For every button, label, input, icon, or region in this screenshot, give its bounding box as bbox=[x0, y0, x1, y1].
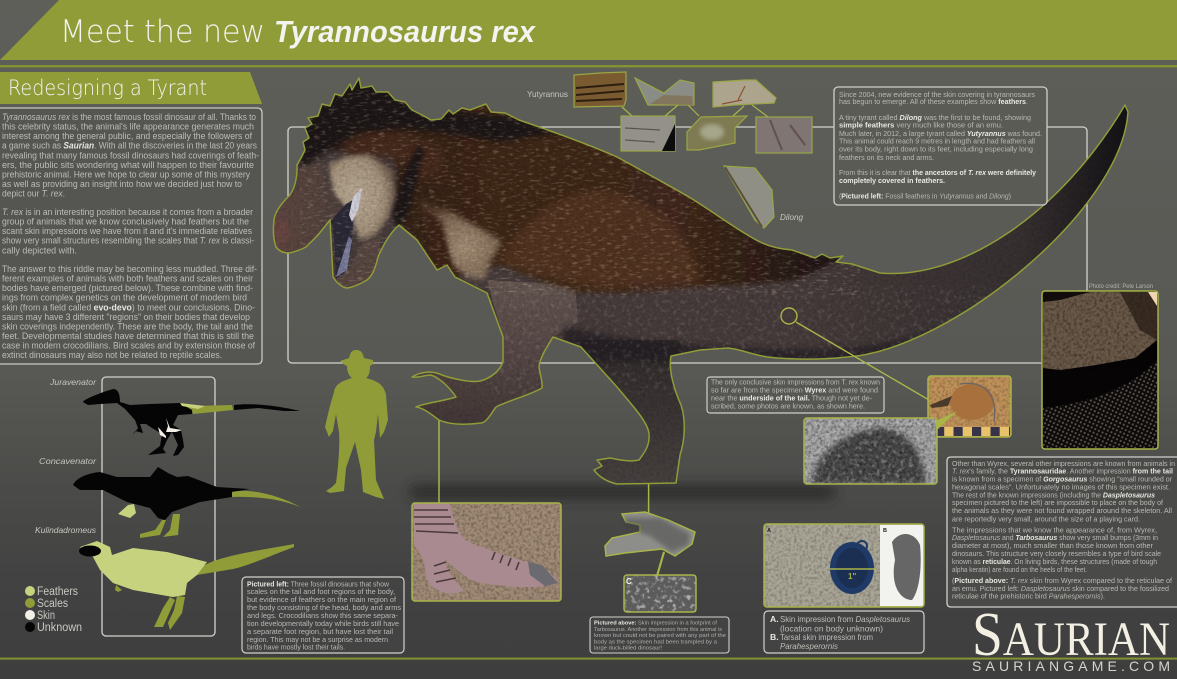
panel: feather evidence text bbox=[834, 87, 1047, 205]
panel: pictured above text: Pictured above: Skin impression in a footprint of bbox=[594, 620, 717, 626]
panel: A B captions: Skin impression from Daspletosaurus bbox=[780, 614, 911, 624]
rex forward leg bbox=[416, 280, 578, 378]
panel: feather evidence text: Since 2004, new evidence of the skin covering in tyrannosaurs bbox=[839, 90, 1035, 99]
panel: A B captions: (location on body unknown) bbox=[780, 623, 883, 633]
photo: Daspletosaurus skin and Parahesperornis tarsal: A bbox=[767, 528, 771, 534]
panel: other impressions text: known as reticulae. On living birds, these structures (made of tough bbox=[952, 557, 1157, 566]
rex back leg bbox=[594, 340, 684, 434]
rex chest cream fur bbox=[420, 200, 502, 280]
legend: Feathers bbox=[37, 586, 78, 598]
panel: other impressions text: Daspletosaurus and Tarbosaurus show very small bumps (3mm in bbox=[952, 533, 1158, 542]
rex snout tint bbox=[274, 222, 288, 242]
panel: intro text: a game such as Saurian. With all the discoveries in the last 20 years bbox=[2, 141, 258, 151]
panel: feather evidence text: A tiny tyrant called Dilong was the first to be found, showing bbox=[839, 113, 1031, 122]
callout line: left foot to photo bbox=[438, 420, 440, 504]
fossil photo 1 bbox=[574, 72, 626, 107]
panel: pictured above text: Tarbosaurus. Another impression from this animal is bbox=[594, 627, 722, 633]
panel: intro text: group of animals that we know conclusively had feathers but the bbox=[2, 217, 249, 227]
panel: intro text: ers, the public sits wondering what will happen to their favourite bbox=[2, 160, 254, 170]
panel: other impressions text: is known from a specimen of Gorgosaurus showing "small rounded or bbox=[952, 475, 1173, 484]
photo: Daspletosaurus skin and Parahesperornis tarsal: 1" bbox=[848, 572, 856, 581]
rex hanging arm fur bbox=[424, 208, 456, 271]
panel: pictured left text: scales on the tail and foot regions of the body, bbox=[247, 587, 395, 596]
rex scale mottling bbox=[487, 285, 1047, 395]
label: Dilong: Dilong bbox=[780, 212, 803, 222]
panel: intro text: case in modern crocodilians. Bird scales and by extension those of bbox=[2, 341, 256, 351]
panel: Wyrex text: The only conclusive skin impressions from T. rex known bbox=[711, 378, 880, 386]
panel: intro text: scant skin impressions we have from it and it's immediate relatives bbox=[2, 226, 253, 236]
panel: pictured left text: and legs. Crocodilians show this same separa- bbox=[247, 611, 399, 620]
panel: other impressions text: The impressions that we know the appearance of, from Wyrex, bbox=[952, 526, 1157, 534]
panel: three dinosaurs skin comparison frame bbox=[102, 377, 215, 636]
fossil photo 4 bbox=[621, 116, 675, 151]
panel: other impressions text bbox=[947, 457, 1177, 607]
silhouette: Juravenator bbox=[83, 389, 300, 456]
rex lower jaw bbox=[333, 238, 380, 290]
panel: pictured left text: region. This may not be a surprise as modern bbox=[247, 635, 388, 644]
silhouette: Concavenator bbox=[73, 467, 302, 538]
panel: other impressions text: reticulae of the prehistoric bird Parahesperornis). bbox=[952, 592, 1105, 600]
panel: intro text: as well as providing an insight into how we decided just how to bbox=[2, 179, 242, 189]
panel: intro text: ings from complex genetics on the development of modern bird bbox=[2, 293, 247, 303]
panel: pictured above text: large duck-billed dinosaur! bbox=[594, 646, 662, 652]
panel: intro text: skin coverings independently. These are the body, the tail and the bbox=[2, 322, 253, 332]
section heading: Redesigning a Tyrant: Redesigning a Tyrant bbox=[8, 76, 207, 100]
photo C: Tarbosaurus skin detail bbox=[624, 575, 696, 612]
rex shoulder fur highlight bbox=[500, 190, 700, 288]
rex skin texture bbox=[274, 98, 1033, 482]
panel: feather evidence text: completely covered in feathers. bbox=[839, 176, 945, 185]
panel: intro text: The answer to this riddle may be becoming less muddled. Three dif- bbox=[2, 264, 257, 274]
panel: pictured above text: body as the specimen had been trampled by a bbox=[594, 640, 718, 646]
rex skin base bbox=[287, 107, 1128, 430]
panel: intro text: prehistoric animal. Here we hope to clear up some of this mystery bbox=[2, 169, 251, 179]
panel: other impressions text: hexagonal scales". Unfortunately no images of this specimen exist. bbox=[952, 482, 1170, 491]
photo: Wyrex skin greyscale bbox=[804, 411, 957, 484]
panel: A B captions: Tarsal skin impression from bbox=[780, 632, 873, 642]
label: Juravenator: Juravenator bbox=[49, 377, 97, 387]
fossil feather connectors bbox=[622, 105, 768, 117]
photo: Daspletosaurus skin and Parahesperornis tarsal: B bbox=[883, 528, 887, 534]
panel: intro text bbox=[0, 108, 262, 364]
panel: intro text: Tyrannosaurus rex is the most famous fossil dinosaur of all. Thanks to bbox=[2, 112, 256, 122]
panel: intro text: revealing that many famous fossil dinosaurs had coverings of feath- bbox=[2, 150, 259, 160]
panel: pictured left text: tion developmentally today while birds still have bbox=[247, 619, 399, 628]
panel: A B captions: A. bbox=[770, 614, 779, 624]
panel: pictured left text: the body consisting of the head, body and arms bbox=[247, 603, 401, 612]
fossil photo 5 bbox=[687, 116, 747, 150]
panel: other impressions text: specimen pictured to the left) are impossible to place on the body of bbox=[952, 498, 1163, 507]
title: Meet the new bbox=[60, 14, 265, 50]
panel: other impressions text: are reportedly very small, around the size of a playing card. bbox=[952, 514, 1140, 524]
panel: other impressions text: the animals as they were not found wrapped around the skeleton. All bbox=[952, 506, 1172, 515]
human scale silhouette bbox=[325, 350, 388, 499]
ground shadow bbox=[410, 485, 835, 499]
panel: other impressions text: an emu. Pictured left: Daspletosaurus skin compared to the fossilized bbox=[952, 584, 1169, 593]
label: Concavenator: Concavenator bbox=[39, 456, 97, 466]
panel: pictured left text: but evidence of feathers on the main region of bbox=[247, 595, 396, 604]
rex reddish upper neck bbox=[342, 132, 442, 178]
panel: Wyrex text bbox=[707, 377, 884, 413]
fossil photo: Dilong bbox=[724, 166, 774, 228]
title bbox=[60, 14, 537, 50]
panel: intro text: T. rex is in an interesting position because it comes from a broader bbox=[2, 207, 253, 217]
panel: feather evidence text: This animal could reach 9 metres in length and had feathers all bbox=[839, 136, 1035, 146]
panel: feather evidence text: (Pictured left: Fossil feathers in Yutyrannus and Dilong) bbox=[839, 192, 1011, 200]
photo: Daspletosaurus skin and Parahesperornis tarsal bbox=[764, 524, 924, 607]
rex fur coat bbox=[330, 105, 840, 295]
panel: A B captions: Parahesperornis bbox=[780, 641, 839, 651]
panel: intro text: skin (from a field called evo-devo) to meet our conclusions. Dino- bbox=[2, 302, 255, 312]
bottom rule bbox=[0, 658, 1177, 660]
panel: intro text: show very small structures resembling the scales that T. rex is classi- bbox=[2, 236, 254, 246]
panel: rex backing frame bbox=[288, 127, 1087, 363]
rex lower body shading bbox=[560, 326, 950, 362]
rex cheek cream fur bbox=[328, 154, 396, 240]
panel: intro text: saurs may have 3 different "regions" on their bodies that develop bbox=[2, 312, 250, 322]
title: Tyrannosaurus rex bbox=[274, 14, 537, 49]
panel: pictured left text bbox=[242, 577, 404, 653]
title banner bbox=[0, 0, 1177, 67]
panel: feather evidence text: simple feathers very much like those of an emu. bbox=[839, 120, 1003, 130]
rex dark mane bbox=[298, 80, 557, 168]
panel: feather evidence text: has begun to emerge. All of these examples show feathers. bbox=[839, 97, 1028, 106]
T. rex illustration bbox=[270, 70, 1140, 495]
panel: Wyrex text: so far are from the specimen Wyrex and were found bbox=[711, 386, 878, 394]
panel: intro text: feet. Developmental studies have determined that this is still the bbox=[2, 331, 254, 341]
photo C: Tarbosaurus skin detail: C bbox=[626, 577, 632, 586]
legend: Unknown bbox=[37, 622, 82, 634]
leader line fossil to detail bbox=[657, 552, 664, 576]
rex mouth interior bbox=[331, 200, 354, 279]
legend: Scales bbox=[37, 598, 68, 610]
panel: intro text: cally depicted with. bbox=[2, 245, 77, 255]
label: Yutyrannus: Yutyrannus bbox=[527, 89, 568, 99]
rex outline bbox=[273, 78, 1128, 484]
panel: feather evidence text: Much later, in 2012, a large tyrant called Yutyrannus was found. bbox=[839, 129, 1042, 138]
section heading: Redesigning a Tyrant bbox=[0, 72, 262, 104]
panel: other impressions text: Other than Wyrex, several other impressions are known from animals in bbox=[952, 459, 1175, 468]
panel: intro text: bodies have emerged (pictured below). These combine with find- bbox=[2, 283, 253, 293]
panel: pictured left text: birds have mostly lost their tails. bbox=[247, 643, 345, 652]
legend: Skin bbox=[37, 610, 55, 622]
silhouette: Kulindadromeus bbox=[79, 541, 294, 630]
panel: intro text: interest among the general public, and especially the followers of bbox=[2, 131, 253, 141]
panel: A B captions bbox=[764, 611, 924, 653]
panel: pictured left text: a separate foot region, but have lost their tail bbox=[247, 627, 393, 636]
fossil footprint Tarbosaurus bbox=[605, 512, 695, 556]
photo: T. rex skin versus emu reticulae bbox=[1042, 291, 1158, 449]
callout line: right foot to fossil bbox=[648, 484, 650, 514]
panel: other impressions text: dinosaurs. This structure very closely resembles a type of bird scale bbox=[952, 549, 1161, 558]
fossil photo 6 bbox=[756, 117, 812, 153]
panel: A B captions: B. bbox=[770, 632, 779, 642]
panel: Wyrex text: scribed, some photos are known, as shown here. bbox=[711, 402, 865, 410]
fossil photos: Yutyrannus bbox=[574, 72, 812, 153]
panel: intro text: extinct dinosaurs may also not be related to reptile scales. bbox=[2, 350, 222, 360]
rex neck dark collar bbox=[392, 145, 424, 228]
panel: pictured above text: known but could not be paired with any part of the bbox=[594, 633, 726, 639]
legend bbox=[25, 586, 82, 634]
panel: pictured left text: Pictured left: Three fossil dinosaurs that show bbox=[247, 580, 390, 588]
panel: other impressions text: alpha keratin) are found on the heels of the feet. bbox=[952, 565, 1087, 574]
photo: bird foot with scales bbox=[412, 503, 561, 601]
magnifier circle and leader to Wyrex skin bbox=[781, 308, 929, 400]
panel: Wyrex text: near the underside of the tail. Though not yet de- bbox=[711, 394, 873, 402]
rex fur texture bbox=[300, 90, 860, 295]
panel: intro text: this celebrity status, the animal's life appearance generates much bbox=[2, 122, 254, 132]
fossil photo 3 bbox=[713, 80, 776, 107]
panel: other impressions text: The rest of the known impressions (including the Daspletosaurus bbox=[952, 490, 1155, 499]
panel: other impressions text: T. rex's family, the Tyrannosauridae. Another impression from the tail bbox=[952, 467, 1173, 476]
fossil photo 2 bbox=[635, 78, 694, 105]
rex teeth row bbox=[336, 236, 352, 277]
rex mouth flesh bbox=[349, 188, 362, 222]
panel: intro text: ferent examples of animals with both feathers and scales on their bbox=[2, 274, 253, 284]
panel: other impressions text: diameter at most), much smaller than those known from other bbox=[952, 541, 1154, 550]
rex head skin bbox=[272, 162, 344, 256]
panel: feather evidence text: feathers on its neck and arms. bbox=[839, 153, 934, 162]
label: Kulindadromeus: Kulindadromeus bbox=[35, 525, 97, 535]
logo: Saurian: SAURIANGAME.COM bbox=[972, 658, 1170, 674]
panel: intro text: depict our T. rex. bbox=[2, 189, 65, 199]
panel: feather evidence text: over its body, right down to its feet, including especially long bbox=[839, 144, 1033, 154]
photo: Wyrex skin impression orange bbox=[928, 376, 1011, 437]
photo credit: Photo credit: Pete Larson bbox=[1089, 283, 1153, 290]
panel: other impressions text: (Pictured above: T. rex skin from Wyrex compared to the reticulae of bbox=[952, 576, 1172, 585]
panel: pictured above text bbox=[590, 617, 729, 653]
panel: feather evidence text: From this it is clear that the ancestors of T. rex were definitely bbox=[839, 168, 1036, 177]
